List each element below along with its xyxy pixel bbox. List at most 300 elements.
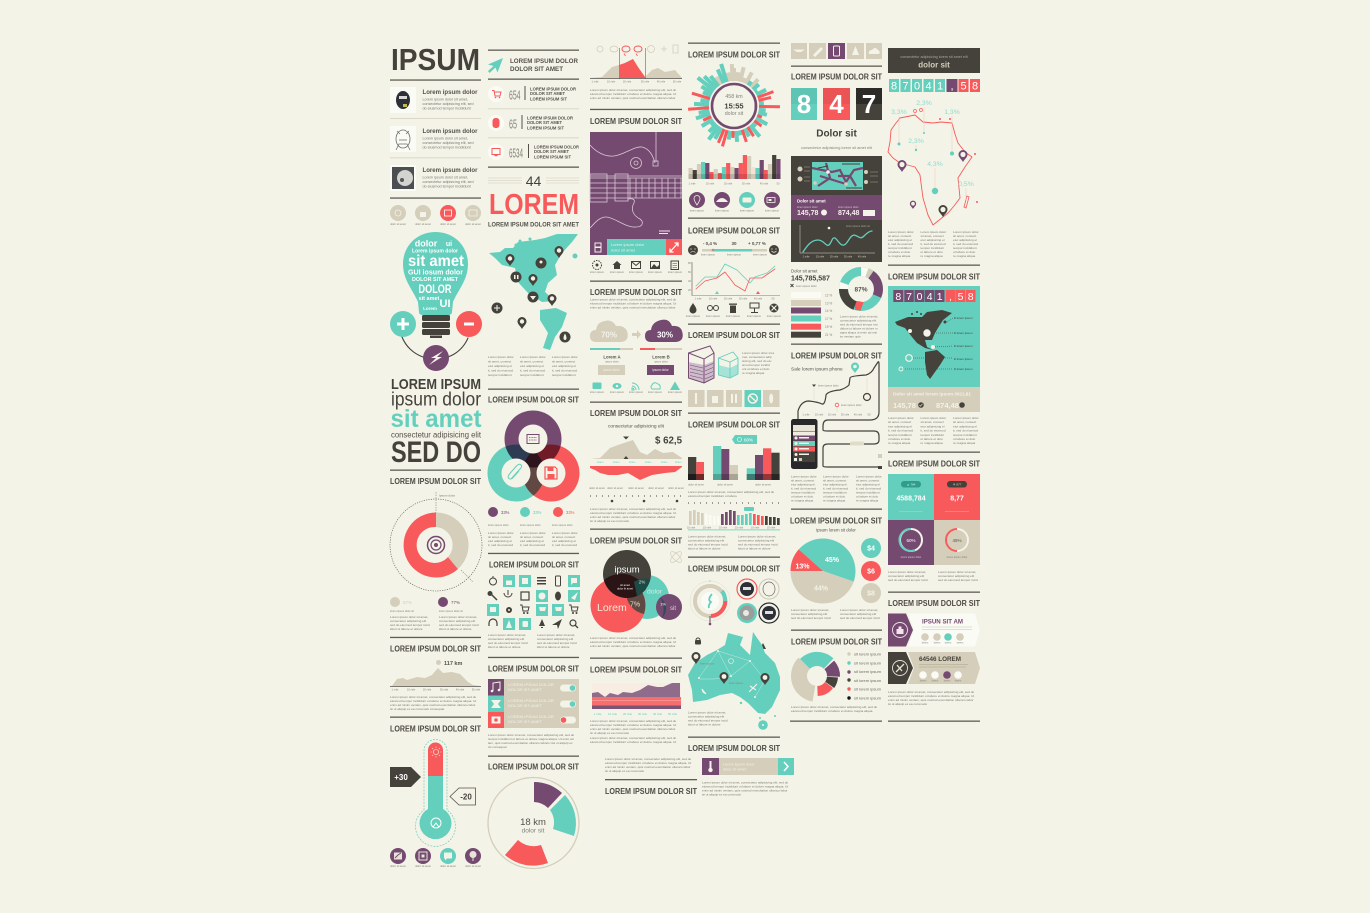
percent labels: 0,5% — [958, 181, 974, 188]
row 65: LOREM IPSUM DOLOR — [527, 116, 574, 120]
panel: 117 km area chart: isi ut aliquip ex ea commodo consequat — [390, 707, 444, 711]
bulb base — [422, 315, 450, 338]
panel: quad tiles: 4588,784 — [896, 496, 926, 502]
panel: phone route chart: re magna aliqua — [856, 498, 878, 502]
panel: 117 km area chart: LOREM IPSUM DOLOR SIT — [390, 644, 481, 654]
panel: teal americas map: re magna aliqua — [920, 441, 943, 445]
row 654: LOREM IPSUM DOLOR — [530, 86, 577, 92]
panel: line chart with faces: lorem ipsum — [727, 252, 741, 256]
column 6: africa panel: it, sed do eiusmod — [888, 242, 913, 246]
column 2: header list — [488, 50, 580, 228]
panel: target donut: consectetur adipisicing elit — [439, 619, 475, 623]
teal icons — [592, 382, 680, 390]
progress bars — [590, 348, 633, 350]
panel: grouped bar chart: LOREM IPSUM DOLOR SIT — [688, 420, 780, 430]
panel: clouds 70 / 30: Lorem B — [652, 354, 670, 360]
panel: line chart with faces: lorem ipsum — [701, 252, 715, 256]
dark dashboard panel: 1 mile — [803, 254, 810, 258]
panel: target donut: sed do eiusmod tempor incid — [439, 623, 479, 627]
panel: thermometer banner: eiusmod tempor incididunt ut labore et dolore magna aliqua. Ut — [702, 784, 788, 788]
panel: thermometer banner — [688, 744, 794, 796]
panel: segmented donut with legend: sit lorem ipsum — [854, 652, 881, 656]
column 6: africa panel — [888, 48, 980, 258]
panel: mirrored area chart: lorem — [597, 460, 604, 464]
digit counter: 4 — [925, 80, 932, 92]
map: Africa outline — [888, 115, 972, 225]
panel: phone route chart: ut labore et dolo — [791, 494, 813, 498]
row 654: 654 — [509, 88, 520, 102]
panel: 117 km area chart: Lorem ipsum dolor sit amet, consectetur adipisicing elit, sed do — [390, 695, 476, 699]
panel: toggle list: iam, quis nostrud exercitation ullamco laboris nisi ut aliquip ex — [488, 741, 573, 745]
panel: clouds 70 / 30: lorem ipsum — [648, 390, 662, 394]
panel: quad tiles: lorem ipsum dolor — [947, 555, 967, 559]
dark dashboard panel — [791, 156, 882, 262]
panel: 145,785,587 stats: 17 % — [825, 317, 832, 321]
dark dashboard panel: lorem ipsum dolor — [838, 205, 859, 209]
digits: 8 — [968, 291, 974, 303]
panel: venn diagram with icons: LOREM IPSUM DOLOR SIT — [488, 396, 579, 404]
counter 4: 4 — [829, 89, 844, 119]
panel: teal americas map: Lorem ipsum dolor — [953, 416, 979, 420]
panel: icon grid: Lorem ipsum dolor sit amet, — [488, 633, 526, 637]
panel: icon grid: idunt ut labore et dolore — [537, 645, 570, 649]
panel: 145,785,587 stats — [790, 268, 878, 338]
panel: icon grid: sed do eiusmod tempor incid — [488, 641, 528, 645]
panel: venn diagram with icons: it, sed do eiusmod — [552, 543, 577, 547]
panel: venn diagram with icons: etur adipisicing el — [488, 539, 512, 543]
panel: teal americas map: LOREM IPSUM DOLOR SIT — [888, 272, 980, 282]
profile item 2: do eiusmod tempor incididunt — [422, 145, 471, 149]
panel: phone route chart: 20 mile — [828, 412, 837, 416]
panel: teal americas map: Lorem ipsum dolor — [920, 416, 946, 420]
map pins — [506, 254, 514, 266]
panel: 145,785,587 stats: consectetur adipisicing elit — [840, 318, 876, 322]
panel: line chart with faces: 10 mile — [709, 296, 718, 300]
panel: milk cartons: LOREM IPSUM DOLOR SIT — [688, 331, 780, 340]
panel: phone route chart: sit amet, consect — [823, 478, 846, 482]
panel: target donut: idunt ut labore et dolore — [390, 627, 423, 631]
panel: venn diagram with icons: 33% — [533, 510, 542, 515]
panel: 145,785,587 stats: 19 % — [825, 325, 832, 329]
panel: quad tiles: Lorem ipsum dolor sit amet, — [888, 570, 926, 574]
profile item 1: Lorem ipsum dolor sit amet, — [422, 98, 468, 102]
column 6: africa panel: Lorem ipsum dolor — [888, 230, 914, 234]
panel: arrow banners: eiusmod tempor incididunt ut labore et dolore magna aliqua. Ut — [888, 694, 974, 698]
panel: phone route chart: sit amet, consect — [791, 478, 814, 482]
panel: gauge and avatars — [688, 564, 780, 730]
panel: grouped bar chart: dolor sit amet — [755, 482, 771, 486]
panel: clouds 70 / 30: ipsum dolor — [603, 368, 621, 372]
panel: teal americas map: tempor incididunt — [888, 433, 912, 437]
panel: arrow banners: enim ad minim veniam, quis nostrud exercitation ullamco labor — [888, 698, 973, 702]
panel: 117 km area chart: 20 mile — [423, 688, 432, 692]
icon row: four round buttons: dolor sit amet — [415, 222, 431, 226]
price circles — [861, 538, 881, 558]
donut chart — [404, 512, 458, 577]
panel: venn diagram with icons: Lorem ipsum dolor — [552, 531, 578, 535]
icon: paperclip — [508, 464, 522, 479]
column 6: africa panel: etur adipisicing el — [953, 238, 977, 242]
panel: quad tiles: lorem ipsum dolor — [901, 555, 921, 559]
panel: guitar: lorem ipsum — [668, 270, 682, 274]
panel: venn diagram with icons: lorem ipsum dolor — [520, 523, 541, 527]
legend — [390, 597, 400, 607]
panel: grouped bar chart: dolor sit amet — [717, 482, 733, 486]
panel: line chart with faces: 30 — [731, 241, 737, 246]
map text: it, sed do eiusmod — [488, 368, 513, 372]
panel: thermometer banner: isi ut aliquip ex ea commodo — [702, 792, 741, 796]
guitar drawing — [590, 132, 682, 228]
percent labels: 3,3% — [891, 109, 907, 116]
panel: phone route chart: it, sed do eiusmod — [823, 486, 848, 490]
panel: color grouped columns: 10 mile — [719, 526, 728, 530]
panel: target donut: consectetur adipisicing elit — [390, 619, 426, 623]
row 6534: LOREM IPSUM DOLOR — [534, 144, 580, 150]
panel: phone route chart: 1 mile — [803, 412, 810, 416]
small icons — [695, 640, 701, 644]
bottom orphan text and heading: isi ut aliquip ex ea commodo — [605, 769, 644, 773]
panel: teal americas map — [888, 272, 980, 445]
panel: grouped bar chart — [688, 420, 780, 498]
panel: stacked area chart: eiusmod tempor incididunt ut labore et dolore magna aliqua. Ut — [590, 740, 676, 744]
digits: 5 — [958, 291, 964, 303]
bar chart with icons: lorem ipsum — [715, 208, 729, 212]
panel: venn diagram with icons: it, sed do eiusmod — [520, 543, 545, 547]
light bulb word cloud: Lorem ipsum dolor — [412, 248, 458, 254]
panel: clouds 70 / 30: LOREM IPSUM DOLOR SIT — [590, 288, 682, 297]
panel: 117 km area chart: 10 mile — [407, 688, 416, 692]
panel: teal americas map: it, sed do eiusmod — [920, 429, 946, 433]
bottom icons — [390, 848, 481, 868]
panel: line chart with faces: 80 — [688, 261, 691, 265]
column 3: weather area chart: enim ad minim veniam, quis nostrud exercitation ullamco labor — [590, 96, 675, 100]
panel: toggle list: Lorem ipsum dolor sit amet, consectetur adipisicing elit, sed do — [488, 733, 574, 737]
panel: quad tiles: sed do eiusmod tempor incid — [888, 578, 928, 582]
line chart — [800, 225, 875, 253]
panel: pie chart: 44% — [814, 586, 829, 592]
panel: teal americas map: ut labore et dolo — [953, 437, 975, 441]
panel: milk cartons: smod tempor incidid — [742, 363, 770, 367]
panel: mirrored area chart: dolor sit amet — [589, 486, 605, 490]
panel: quad tiles: Lorem ipsum dolor sit amet, — [938, 570, 976, 574]
panel: clouds 70 / 30: eiusmod tempor incididunt ut labore et dolore magna aliqua. Ut — [590, 302, 676, 306]
map text: etur adipisicing el — [488, 364, 512, 368]
world map with pins: it, sed do eiusmod — [520, 368, 545, 372]
panel: thermometer banner: Lorem ipsum dolor — [723, 762, 754, 766]
icon row: four round buttons: dolor sit amet — [390, 222, 406, 226]
thermometer body — [428, 743, 443, 776]
cloud 30: 30% — [657, 330, 673, 340]
panel: phone route chart: tempor incididunt — [856, 490, 880, 494]
panel: stacked area chart: enim ad minim veniam, quis nostrud exercitation ullamco labor — [590, 727, 675, 731]
row 6534: 6534 — [509, 146, 523, 160]
percent labels: 2,3% — [908, 138, 924, 145]
light bulb word cloud: DOLOR — [418, 284, 452, 296]
counter 8: 8 — [797, 89, 811, 119]
column 6: africa panel: etur adipisicing el — [920, 238, 945, 242]
digits: , — [949, 291, 952, 303]
panel: toggle list — [488, 664, 579, 749]
panel: arrow banners — [888, 599, 980, 706]
phone — [791, 419, 818, 469]
panel: segmented donut with legend: sit lorem ipsum — [854, 696, 882, 700]
panel: target donut: 57% — [403, 600, 412, 605]
44 LOREM headline: LOREM — [489, 189, 579, 221]
carton small — [718, 352, 738, 378]
panel: phone route chart: etur adipisicing el — [823, 482, 847, 486]
44 LOREM headline — [488, 173, 580, 228]
panel: target donut: Ipsum dolor — [439, 494, 455, 498]
panel: phone route chart: it, sed do eiusmod — [791, 486, 816, 490]
panel: teal americas map: lil lorem ipsum — [954, 357, 973, 361]
panel: 117 km area chart — [390, 644, 481, 711]
panel: color grouped columns: idunt ut labore et dolore — [738, 546, 771, 550]
column 6: africa panel: consectetur adipisicing lorem sit amet elit — [900, 55, 968, 59]
panel: milk cartons: Lorem ipsum dolor sit a — [742, 351, 774, 355]
panel: overlapping circles: dolor — [647, 588, 663, 596]
panel: quad tiles: LOREM IPSUM DOLOR SIT — [888, 460, 980, 468]
light bulb word cloud: Lorem — [423, 306, 437, 311]
panel: phone route chart: Lorem ipsum dolor — [791, 474, 817, 478]
panel: toggle list: LOREM IPSUM DOLOR SIT — [488, 664, 579, 674]
panel: mirrored area chart: lorem — [629, 460, 636, 464]
panel: thermometer banner: enim ad minim veniam, quis nostrud exercitation ullamco labor — [702, 788, 787, 792]
panel: gauge and avatars: consectetur adipisicing elit — [688, 714, 724, 718]
bottom icons: dolor sit amet — [465, 864, 481, 868]
digit counter: 8 — [972, 80, 978, 92]
column 6: africa panel: Lorem ipsum dolor — [920, 230, 946, 234]
percent labels: 4,3% — [927, 161, 943, 168]
teal squares — [487, 575, 580, 630]
typographic block: consectetur adipisicing elit — [391, 430, 482, 440]
dark dashboard panel: lorem ipsum dolor sit — [846, 224, 870, 228]
area top — [590, 440, 682, 459]
panel: 117 km area chart: 50 mile — [472, 688, 481, 692]
panel: pie chart: $8 — [867, 590, 875, 598]
panel: venn diagram with icons: Lorem ipsum dolor — [488, 531, 514, 535]
panel: overlapping circles: Lorem ipsum dolor sit amet, consectetur adipisicing elit, sed do — [590, 636, 676, 640]
column 2: header list: LOREM IPSUM DOLOR — [510, 58, 578, 65]
panel: teal americas map: ut labore et dolo — [920, 437, 943, 441]
panel: stacked area chart: eiusmod tempor incididunt ut labore et dolore magna aliqua. Ut — [590, 723, 676, 727]
panel: 18 km radial chart — [488, 762, 579, 868]
panel: venn diagram with icons: sit amet, consect — [520, 535, 543, 539]
column 4: radial clock chart — [688, 42, 780, 147]
panel: toggle list: DOLOR SIT AMET — [508, 720, 543, 724]
banner 1: IPSUN SIT AM — [922, 618, 963, 626]
profile item 2: Lorem ipsum dolor — [422, 128, 478, 135]
bar chart with icons: 10 mile — [706, 182, 715, 186]
row 65: LOREM IPSUM SIT — [527, 126, 564, 130]
panel: phone route chart: tempor incididunt — [823, 490, 847, 494]
map text: Lorem ipsum dolor — [488, 355, 514, 359]
map: Australia — [688, 632, 780, 714]
panel: mirrored area chart: lorem — [675, 460, 682, 464]
panel: teal americas map: it, sed do eiusmod — [888, 429, 913, 433]
panel: phone route chart — [791, 352, 882, 502]
dark dashboard panel: 20 mile — [830, 254, 839, 258]
profile item 3: Lorem ipsum dolor — [422, 167, 478, 174]
panel: 18 km radial chart: LOREM IPSUM DOLOR SIT — [488, 762, 579, 772]
banner 2: lorem — [920, 679, 926, 683]
44 LOREM headline: LOREM IPSUM DOLOR SIT AMET — [488, 222, 580, 228]
map pins — [692, 652, 700, 664]
panel: thermometer: LOREM IPSUM DOLOR SIT — [390, 724, 481, 734]
panel: thermometer banner: dolor sit amet — [723, 768, 747, 772]
counter 7: 7 — [862, 89, 876, 119]
panel: stacked area chart: Lorem ipsum dolor sit amet, consectetur adipisicing elit, sed do — [590, 736, 676, 740]
row 654: LOREM IPSUM SIT — [530, 96, 567, 102]
panel: 145,785,587 stats: 14 % — [825, 309, 832, 313]
panel: icon grid: Lorem ipsum dolor sit amet, — [537, 633, 575, 637]
panel: overlapping circles: Lorem — [597, 602, 627, 614]
panel: mirrored area chart: $ 62,5 — [655, 436, 682, 446]
panel: line chart with faces: 40 — [688, 279, 691, 283]
panel: quad tiles: 45% — [952, 538, 962, 543]
percent labels: 1,3% — [944, 109, 960, 116]
column 3: weather area chart: 20 mile — [623, 80, 632, 84]
panel: 117 km area chart: enim ad minim veniam, quis nostrud exercitation ullamco labor — [390, 703, 475, 707]
panel: clouds 70 / 30: lorem ipsum — [668, 390, 682, 394]
panel: mirrored area chart: lorem — [661, 460, 668, 464]
panel: phone route chart: it, sed do eiusmod — [856, 486, 881, 490]
panel: 145,785,587 stats: sed do eiusmod tempor inci — [840, 322, 878, 326]
mini map — [812, 162, 863, 190]
panel: guitar: Lorem ipsum dolor — [611, 242, 644, 247]
panel: teal americas map: sit amet, consect — [953, 420, 976, 424]
panel: quad tiles: 60% — [906, 538, 916, 543]
dark dashboard panel: 10 mile — [816, 254, 825, 258]
panel: color grouped columns: consectetur adipisicing elit — [738, 538, 774, 542]
panel: pie chart: 13% — [795, 564, 810, 570]
panel: grouped bar chart: Lorem ipsum dolor sit amet, consectetur adipisicing elit, sed do — [688, 490, 774, 494]
banner 2: lorem — [932, 679, 938, 683]
panel: phone route chart: 40 mile — [854, 412, 863, 416]
panel: stacked area chart: 1 mile — [594, 712, 602, 716]
panel: 117 km area chart: 117 km — [444, 661, 462, 667]
profile item 1: consectetur adipisicing elit, sed — [422, 102, 474, 106]
digits: 0 — [917, 291, 923, 303]
venn legend — [488, 507, 498, 517]
panel: grouped bar chart: 60% — [744, 438, 753, 442]
column 6: africa panel: tempor incididunt — [888, 246, 912, 250]
panel: pie chart: 45% — [825, 557, 840, 564]
world map with pins: it, sed do eiusmod — [552, 368, 577, 372]
profile item 1: do eiusmod tempor incididunt — [422, 106, 471, 110]
panel: icon grid: idunt ut labore et dolore — [488, 645, 521, 649]
panel: line chart with faces: 40 mile — [754, 296, 763, 300]
glyphs dark — [488, 576, 578, 629]
panel: phone route chart: lorem ipsum dolor — [818, 384, 839, 388]
bottom icons: dolor sit amet — [440, 864, 456, 868]
dark dashboard panel: 30 mile — [844, 254, 853, 258]
panel: grouped bar chart: dolor sit amet — [688, 482, 704, 486]
tag -20 — [450, 788, 476, 805]
digits: 4 — [927, 291, 933, 303]
bar chart with icons: lorem ipsum — [740, 208, 754, 212]
panel: pie chart: LOREM IPSUM DOLOR SIT — [790, 516, 882, 526]
markers — [851, 362, 859, 373]
digits: 8 — [895, 291, 901, 303]
carton large — [688, 346, 714, 383]
area — [392, 668, 480, 686]
panel: venn diagram with icons: lorem ipsum dolor — [488, 523, 509, 527]
tile: purple ring — [900, 529, 922, 551]
panel: segmented donut with legend: sit lorem ipsum — [854, 660, 882, 665]
panel: milk cartons: re magna aliqua — [742, 371, 764, 375]
arrow — [632, 330, 641, 339]
panel: teal americas map: etur adipisicing el — [920, 424, 945, 428]
panel: phone route chart: 50 — [868, 412, 871, 416]
panel: line chart with faces: + 0,77 % — [748, 241, 766, 246]
panel: stacked area chart: isi ut aliquip ex ea commodo — [590, 731, 629, 735]
panel: toggle list: LOREM IPSUM DOLOR — [508, 699, 554, 703]
row 65 — [488, 115, 574, 132]
panel: clouds 70 / 30: ipsum dolor — [652, 368, 670, 372]
digit counter — [889, 79, 980, 92]
panel: phone route chart: Sale lorem ipsum phone — [791, 366, 843, 372]
panel: overlapping circles: ipsum — [614, 564, 640, 576]
panel: clouds 70 / 30 — [590, 288, 683, 394]
panel: segmented donut with legend: eiusmod tempor incididunt ut labore et dolore magna aliqua. — [791, 709, 873, 713]
panel: segmented donut with legend: sit lorem ipsum — [854, 678, 882, 683]
icon row — [690, 303, 778, 314]
panel: venn diagram with icons: 33% — [501, 510, 510, 515]
route — [798, 362, 879, 467]
panel: phone route chart: etur adipisicing el — [791, 482, 815, 486]
panel: 145,785,587 stats: im veniam quis — [840, 334, 861, 338]
column 5: icon squares and counters: consectetur adipisicing lorem sit amet elit — [801, 145, 873, 150]
world map with pins: sit amet, consect — [552, 360, 575, 364]
title: IPSUM: IPSUM — [391, 42, 480, 77]
banner 1: lorem — [945, 640, 951, 644]
panel: icon grid: consectetur adipisicing elit — [537, 637, 573, 641]
icon row: four round buttons — [390, 205, 481, 226]
profile item 3: consectetur adipisicing elit, sed — [422, 180, 474, 184]
world map with pins: sit amet, consect — [520, 360, 543, 364]
panel: clouds 70 / 30: lorem ipsum — [590, 390, 604, 394]
panel: pie chart: Lorem ipsum dolor sit amet, — [791, 608, 829, 612]
row 654 — [488, 86, 577, 102]
digit counter: 5 — [960, 80, 967, 92]
column 6: africa panel: etur adipisicing el — [888, 238, 912, 242]
column 6: africa panel: ut labore et dolo — [920, 250, 943, 254]
tag +30: +30 — [394, 773, 408, 782]
panel: teal americas map: 874,48 — [936, 401, 959, 410]
panel: color grouped columns: 10 mile — [735, 526, 744, 530]
dark dashboard panel: Dolor sit amet — [797, 198, 826, 204]
column 5: icon squares and counters: LOREM IPSUM DOLOR SIT — [791, 72, 882, 82]
bottom orphan text and heading: enim ad minim veniam, quis nostrud exercitation ullamco labor — [605, 765, 690, 769]
panel: line chart with faces: 20 mile — [724, 296, 733, 300]
panel: clouds 70 / 30: ipsum dolor — [654, 360, 668, 364]
panel: overlapping circles: eiusmod tempor incididunt ut labore et dolore magna aliqua. Ut — [590, 640, 676, 644]
panel: guitar: lorem ipsum — [629, 270, 643, 274]
column 6: africa panel: re magna aliqua — [953, 254, 975, 258]
column 6: africa panel: sit amet, consect — [920, 234, 944, 238]
map: americas — [895, 310, 952, 350]
panel: venn diagram with icons: etur adipisicing el — [520, 539, 544, 543]
panel: line chart with faces: 60 — [688, 270, 691, 274]
panel: toggle list: tempor incididunt ut labore et dolore magna aliqua. Ut enim ad — [488, 737, 574, 741]
red line — [696, 269, 775, 291]
bar chart with icons — [688, 155, 780, 212]
panel: quad tiles: 8,77 — [950, 496, 964, 502]
panel: grouped bar chart: eiusmod tempor incididunt ut labore — [688, 494, 737, 498]
bar chart with icons: 1 mile — [689, 182, 696, 186]
panel: pie chart: sed do eiusmod tempor incid — [840, 616, 880, 620]
column 3: weather area chart: 1 mile — [592, 80, 599, 84]
